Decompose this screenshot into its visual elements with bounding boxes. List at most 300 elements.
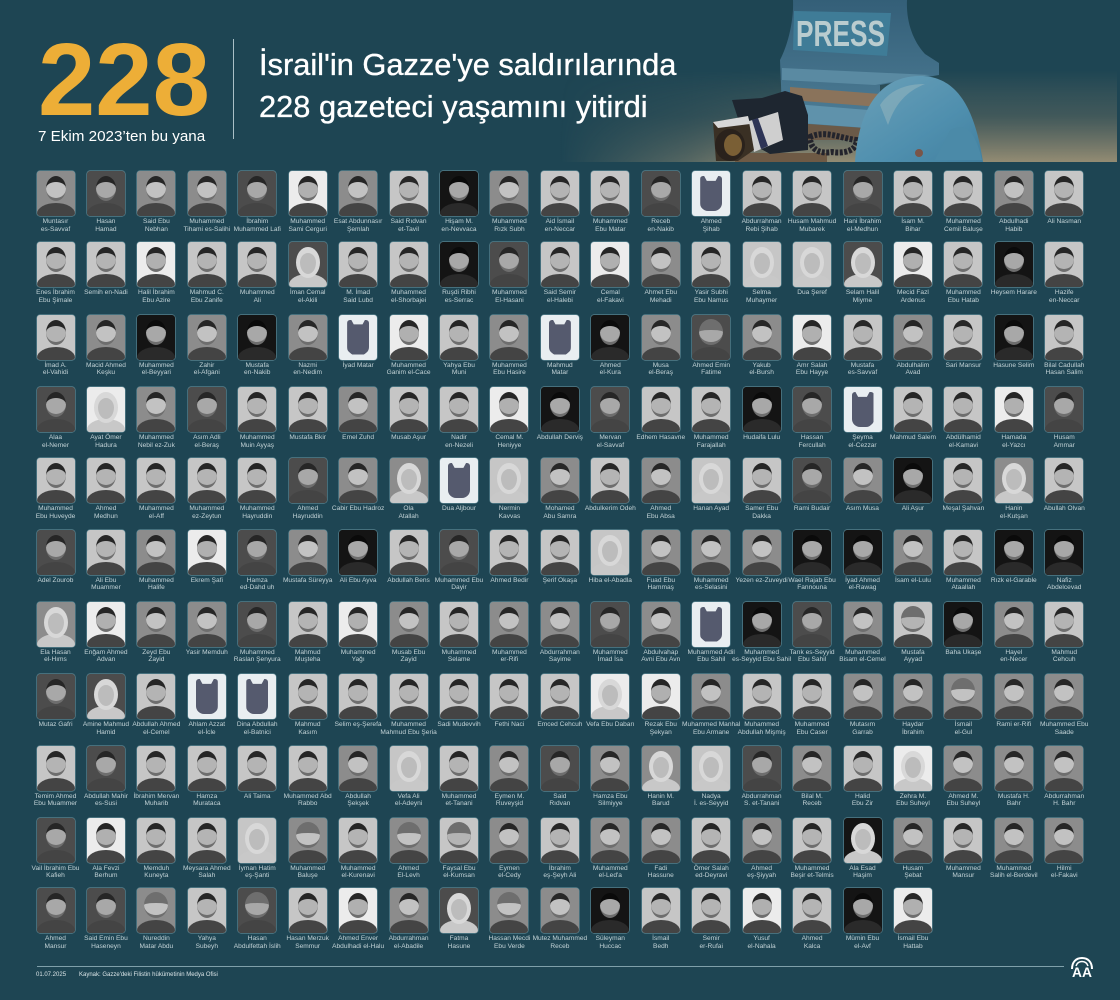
card: Yasir Subhi Ebu Namus: Ebu Namus (694, 297, 728, 304)
card: Mahmud Cehcuh: Cehcuh (1053, 656, 1076, 663)
card: Said Rıdvan et-Tavil (389, 170, 429, 233)
card: Nazmi en-Nedim: en-Nedim (293, 369, 322, 376)
card: Nadir en-Nezeli: Nadir (451, 434, 467, 441)
card: Fatma Hasune: Hasune (448, 943, 470, 950)
card: Muhammed Raslan Şenyura: Muhammed (240, 649, 275, 656)
card: Abdurrahman S. et-Tanani (743, 746, 781, 810)
card: Muhammed ez-Zeytun (188, 458, 226, 522)
card: Muhammed Ali: Ali (254, 297, 261, 304)
card: Ahmed el-Kura: Ahmed (600, 362, 621, 369)
icon: camera (713, 91, 827, 162)
card: Abdurrahman el-Abadile (390, 888, 428, 952)
card: Muhammed Ebu Matar (590, 170, 630, 233)
card: Muhammed Nebil ez-Zuk: Muhammed (139, 434, 174, 441)
card: Sari Mansur: Sari Mansur (946, 362, 981, 369)
card: Mervan el-Savvaf: Mervan (599, 434, 621, 441)
card: Asım Adli el-Beraş: Asım Adli (193, 434, 221, 441)
card: Abdülhamid el-Kamavi: el-Kamavi (949, 442, 978, 449)
card: Muhammed Baluşe: Baluşe (298, 872, 318, 879)
card: Mutez Muhammed Receb: Receb (550, 943, 569, 950)
card: Hanin M. Barud: Barud (652, 800, 670, 807)
card: Eymen el-Cedy (490, 818, 528, 882)
card: Ayat Ömer Hadura: Hadura (95, 442, 117, 449)
card: Rezak Ebu Şekyan: Şekyan (650, 729, 672, 736)
card: Halid Ebu Zir: Halid (855, 793, 870, 800)
card: Mahmud Matar: Mahmud (547, 362, 573, 369)
card: Semir er-Rufai: Semir (703, 935, 720, 942)
card: Baha Ukaşe: Baha Ukaşe (945, 649, 981, 656)
card: Ruşdi Ribhi es-Serrac: Ruşdi Ribhi (442, 289, 476, 296)
card: Yakub el-Bursh: Yakub (753, 362, 771, 369)
card: Mervan el-Savvaf: el-Savvaf (597, 442, 624, 449)
card: İsmail Bedh: İsmail (652, 935, 669, 942)
card: Muhammed et-Tanani (440, 746, 478, 810)
card: Abdullah Mahir es-Susi: Abdullah Mahir (84, 793, 128, 800)
card: Muhammed El-Hasani: Muhammed (492, 289, 527, 296)
card: Muhammed Ebu Huveyde: Muhammed (38, 505, 73, 512)
card: Vail İbrahim Ebu Kafieh: Vail İbrahim Ebu (32, 865, 79, 872)
row 8 (36, 674, 1096, 738)
card: Meysara Ahmed Salah: Meysara Ahmed (183, 865, 231, 872)
card: Baha Ukaşe (944, 602, 982, 666)
icon: coiled cable (810, 134, 856, 152)
card: Ahmet Ebu Mehadi: Mehadi (650, 297, 672, 304)
card: Hanin el-Kutşan: el-Kutşan (1000, 513, 1028, 520)
card: Muhammed el-Beyyari (137, 314, 175, 378)
card: Muhammed ez-Zeytun: ez-Zeytun (192, 513, 221, 520)
card: Muhammed et-Tanani: et-Tanani (445, 800, 473, 807)
card: Memduh Kuneyta (137, 818, 175, 882)
card: Hassan Mecdi Ebu Verde (490, 888, 528, 952)
card: Semir er-Rufai (692, 888, 730, 952)
card: Muhammed Muin Ayyaş: Muhammed (240, 434, 275, 441)
card: Ala Esad Haşim: Ala Esad (849, 865, 876, 872)
card: Musab Ebu Zayid (390, 602, 428, 666)
card: Faysal Ebu el-Kumsan (440, 818, 478, 882)
card: Hasune Selim: Hasune Selim (993, 362, 1034, 369)
card: Muhammed Ataallah (944, 530, 982, 594)
card: Ali Aşur (894, 458, 932, 522)
card: İsmail Ebu Hattab: Hattab (903, 943, 923, 950)
card: Muhammed Yağı: Yağı (352, 656, 365, 663)
card: Muhammed Manhal Ebu Armane: Ebu Armane (693, 729, 729, 736)
card: Muhammed Ali: Muhammed (240, 289, 275, 296)
card: İyad Ahmed el-Rawag: İyad Ahmed (845, 577, 880, 584)
card: Abdurrahman H. Bahr (1045, 746, 1083, 810)
card: Muhammed Selame: Selame (448, 656, 470, 663)
card: Amr Salah Ebu Hayye: Amr Salah (797, 362, 827, 369)
card: Mahmud Kasım: Mahmud (295, 721, 321, 728)
card: Bilal Cadullah Hasan Salim (1045, 314, 1083, 378)
card: Mustafa Ayyad: Ayyad (904, 656, 922, 663)
card: Vefa Ali el-Adeyni (390, 746, 428, 810)
card: Esat Abdunnasır Şemlah: Şemlah (347, 226, 369, 233)
card: İsmail el-Gul: el-Gul (955, 729, 972, 736)
card: Mustafa es-Savvaf (844, 314, 882, 378)
card: Muhammed Abd Rabbo: Rabbo (298, 800, 317, 807)
card: Hasan Merzuk Semmur: Semmur (295, 943, 320, 950)
card: Emced Cehcuh: Emced Cehcuh (537, 721, 582, 728)
card: Hiba el-Abadla: Hiba el-Abadla (589, 577, 632, 584)
card: Ömer Salah ed-Deyravi (692, 818, 730, 882)
card: Mahmud Cehcuh (1045, 602, 1083, 666)
card: Nermin Kavvas: Nermin (499, 505, 520, 512)
card: Muhammed Hayruddin: Hayruddin (242, 513, 272, 520)
card: Rami Budair (793, 458, 831, 522)
card: Rızk el-Garable: Rızk el-Garable (991, 577, 1037, 584)
card: Ahmed Emin Fatime (692, 314, 730, 378)
card: Ahmed Ebu Absa (642, 458, 680, 522)
row 1 (36, 170, 1084, 233)
card: Muhammed Cemil Baluşe: Muhammed (946, 218, 981, 225)
card: Muhammed Salih el-Berdevil: Muhammed (996, 865, 1031, 872)
card: Sadi Mudevvih: Sadi Mudevvih (437, 721, 481, 728)
card: Emel Zuhd (339, 387, 377, 451)
card: Muhammed Bisam el-Cemel (844, 602, 882, 666)
card: Halid Ebu Zir (844, 746, 882, 810)
card: Muhammed el-Led'a: Muhammed (593, 865, 628, 872)
card: Esat Abdunnasır Şemlah: Esat Abdunnasır (334, 218, 382, 225)
card: Husam Mahmud Mubarek (788, 170, 836, 233)
title: İsrail'in Gazze'ye saldırılarında (259, 47, 676, 82)
card: Muhammed el-Led'a: el-Led'a (599, 872, 622, 879)
card: Nermin Kavvas (490, 458, 528, 522)
card: Semih en-Nadi: Semih en-Nadi (84, 289, 128, 296)
card: İsmail Ebu Hattab: İsmail Ebu (898, 935, 928, 942)
card: Hassan Mecdi Ebu Verde: Hassan Mecdi (489, 935, 530, 942)
big number: 228 (38, 22, 210, 137)
card: Hasan Merzuk Semmur (289, 888, 327, 952)
card: Alaa el-Nemer: el-Nemer (42, 442, 69, 449)
card: Muhammed Ganim el-Cace: Muhammed (391, 362, 426, 369)
card: Hasan Hamad: Hasan (96, 218, 115, 225)
card: Abdulhalim Avad: Avad (905, 369, 920, 376)
card: Ali Ebu Ayva (339, 530, 377, 594)
card: İsmail Bedh: Bedh (653, 943, 668, 950)
card: İyad Matar: İyad Matar (343, 362, 374, 369)
card: Dua Aljbour: Dua Aljbour (442, 505, 476, 512)
card: Muhammed Adil Ebu Sahil: Muhammed Adil (688, 649, 735, 656)
card: Vefa Ebu Dabarı: Vefa Ebu Dabarı (586, 721, 634, 728)
card: Muhammed el-Led'a (591, 818, 629, 882)
card: Zehra M. Ebu Suheyl: Ebu Suheyl (896, 800, 930, 807)
card: Mustafa en-Nakib: en-Nakib (244, 369, 270, 376)
card: Edhem Hasavne: Edhem Hasavne (636, 434, 685, 441)
card: Abdullah Mahir es-Susi (87, 746, 125, 810)
card: Yasir Memduh: Yasir Memduh (186, 649, 228, 656)
card: Hasan Abdulfettah İslih: Abdulfettah İslih (234, 943, 281, 950)
card: Ahmed El-Levh: El-Levh (397, 872, 420, 879)
card: Mahmud Matar: Matar (551, 369, 568, 376)
card: Musa el-Beraş (642, 314, 680, 378)
card: Musab Ebu Zayid: Zayid (400, 656, 417, 663)
card: Musa el-Beraş: Musa (653, 362, 669, 369)
card: Eymen el-Cedy: el-Cedy (498, 872, 521, 879)
card: Yakub el-Bursh: el-Bursh (749, 369, 774, 376)
card: Ahmed Bedir: Ahmed Bedir (490, 577, 528, 584)
card: Ala Fevzi Berhum: Ala Fevzi (92, 865, 120, 872)
card: Mustafa Ayyad: Mustafa (901, 649, 925, 656)
card: Ekrem Şafi: Ekrem Şafi (191, 577, 223, 584)
card: Yahya Subeyh: Yahya (198, 935, 216, 942)
card: Hazife en-Neccar: Hazife (1055, 289, 1074, 296)
card: Muhammed Ganim el-Cace: Ganim el-Cace (387, 369, 431, 376)
card: Aid İsmail en-Neccar: en-Neccar (545, 226, 575, 233)
card: Selma Muhaymer (742, 241, 782, 304)
card: Mustafa H. Bahr: Mustafa H. (998, 793, 1030, 800)
row 7 (36, 602, 1096, 666)
card: Yusuf el-Nahala: Yusuf (753, 935, 770, 942)
card: İbrahim eş-Şeyh Ali (541, 818, 579, 882)
card: İsmail Ebu Hattab (894, 888, 932, 952)
card: Mutaz Gafri (36, 674, 74, 738)
title: 228 gazeteci yaşamını yitirdi (259, 89, 648, 124)
card: Rami er-Rifi (995, 674, 1033, 738)
card: İyad Ahmed el-Rawag (844, 530, 882, 594)
card: Muhammed Ganim el-Cace (390, 314, 428, 378)
card: Hassan Fercullah: Fercullah (798, 442, 826, 449)
card: Edhem Hasavne (642, 387, 680, 451)
card: Dina Abdullah el-Batnici: el-Batnici (244, 729, 271, 736)
card: Hamada el-Yazcı: Hamada (1001, 434, 1026, 441)
card: Enes İbrahim Ebu Şimale (36, 241, 76, 304)
card: Hassan Fercullah (793, 387, 831, 451)
card: Şeyma el-Cezzar: Şeyma (852, 434, 873, 441)
card: Semih en-Nadi (84, 241, 128, 296)
card: Hudaifa Lulu: Hudaifa Lulu (743, 434, 780, 441)
card: Muhammed Abd Rabbo: Muhammed Abd (284, 793, 332, 800)
card: Rami Budair: Rami Budair (794, 505, 830, 512)
card: Mahmud Kasım: Kasım (298, 729, 317, 736)
card: Ahlam Azzat el-İcle: Ahlam Azzat (188, 721, 225, 728)
card: İman Cemal el-Akili: İman Cemal (290, 289, 325, 296)
card: Vefa Ali el-Adeyni: Vefa Ali (398, 793, 420, 800)
title (259, 47, 677, 124)
card: Said Emin Ebu Haseneyn: Said Emin Ebu (84, 935, 128, 942)
row 10 (36, 818, 1096, 882)
card: Muhammed el-Shorbajei: el-Shorbajei (391, 297, 426, 304)
card: Fadi Hassune: Fadi (654, 865, 667, 872)
card: Abdulhadi Habib: Habib (1005, 226, 1022, 233)
card: Süleyman Huccac: Huccac (599, 943, 621, 950)
card: Mutez Muhammed Receb: Mutez Muhammed (533, 935, 587, 942)
card: Nadir en-Nezeli: en-Nezeli (445, 442, 473, 449)
card: Süleyman Huccac (591, 888, 629, 952)
card: Nafiz Abdelcevad: Nafiz (1057, 577, 1072, 584)
card: Muhammed Ataallah: Ataallah (951, 584, 975, 591)
card: Muhammed Manhal Ebu Armane: Muhammed Manhal (682, 721, 740, 728)
card: Ahmed Medhun: Medhun (94, 513, 118, 520)
card: Mervan el-Savvaf (591, 387, 629, 451)
card: Ahmed Hayruddin (289, 458, 327, 522)
card: Ahmed Emin Fatime: Fatime (701, 369, 721, 376)
card: Selam Halil Miyme (844, 242, 882, 306)
card: Muhammed el-Shorbajei: Muhammed (391, 289, 426, 296)
card: Hayel en-Necer: Hayel (1005, 649, 1022, 656)
card: Mecid Fazl Ardenus: Ardenus (901, 297, 925, 304)
card: İbrahim Muhammed Lafi: İbrahim (246, 218, 268, 225)
card: İsam M. Bihar (893, 170, 933, 233)
card: Ala Esad Haşim (844, 818, 882, 882)
card: Ola Atallah (390, 458, 428, 522)
card: Mecid Fazl Ardenus (894, 242, 932, 306)
card: Muhammed Ebu Saade (1045, 674, 1083, 738)
card: Abdurrahman H. Bahr: H. Bahr (1053, 800, 1075, 807)
card: Musa el-Beraş: el-Beraş (648, 369, 673, 376)
card: Samer Ebu Dakka: Samer Ebu (745, 505, 778, 512)
card: Ola Atallah: Ola (403, 505, 414, 512)
card: Nadya İ. es-Seyyid: Nadya (702, 793, 721, 800)
card: Muhammed Raslan Şenyura (238, 602, 276, 666)
card: Selma Muhaymer: Selma (752, 289, 771, 296)
card: Hamza ed-Dahd uh (238, 530, 276, 594)
card: Ahmed Bedir (490, 530, 528, 594)
card: Ahmed M. Ebu Suheyl: Ahmed M. (948, 793, 978, 800)
card: Muhammed Ebu Matar: Muhammed (593, 218, 628, 225)
card: Hasan Abdulfettah İslih: Hasan (248, 935, 267, 942)
card: Muhammed Ebu Hasire (490, 314, 528, 378)
card: Hilmi el-Fakavi: el-Fakavi (1051, 872, 1078, 879)
card: Asım Musa: Asım Musa (846, 505, 879, 512)
card: Abdülhamid el-Kamavi (944, 387, 982, 451)
card: Mustafa H. Bahr: Bahr (1007, 800, 1021, 807)
row 11 (36, 888, 1096, 952)
card: Haydar İbrahim: Haydar (902, 721, 924, 728)
card: Heysem Harare: Heysem Harare (991, 289, 1037, 296)
card: Haydar İbrahim (894, 674, 932, 738)
card: Muhammed Ebu Dayir (440, 530, 478, 594)
card: Samer Ebu Dakka (743, 458, 781, 522)
card: Mustafa H. Bahr (995, 746, 1033, 810)
card: Muhammed Ebu Huveyde: Ebu Huveyde (36, 513, 75, 520)
card: Ahmed Hayruddin: Ahmed (297, 505, 318, 512)
card: Abdulkerim Odeh: Abdulkerim Odeh (585, 505, 636, 512)
card: Hilmi el-Fakavi: Hilmi (1057, 865, 1072, 872)
press patch: PRESS (796, 13, 885, 54)
card: Ela Hasan el-Hıms (36, 602, 74, 666)
card: Nureddin Matar Abdu (137, 888, 175, 952)
card: Şerif Okaşa (541, 530, 579, 594)
card: Zehra M. Ebu Suheyl: Zehra M. (900, 793, 926, 800)
card: Hamada el-Yazcı (995, 387, 1033, 451)
card: Muhammed Cemil Baluşe: Cemil Baluşe (944, 226, 983, 233)
card: Ahmed Kalca: Kalca (804, 943, 820, 950)
card: Ahmed Enver Abdulhadi el-Halu (339, 888, 377, 952)
card: Enes İbrahim Ebu Şimale: Enes İbrahim (36, 289, 75, 296)
card: Hamza ed-Dahd uh: ed-Dahd uh (240, 584, 274, 591)
card: Sadi Mudevvih (440, 674, 478, 738)
card: Muhammed Ali (237, 241, 277, 304)
card: Muhammed Hayruddin (238, 458, 276, 522)
card: Ahmed Şihab: Ahmed (701, 218, 722, 225)
card: Rezak Ebu Şekyan: Rezak Ebu (645, 721, 677, 728)
card: Ahmed Ebu Absa: Ebu Absa (647, 513, 675, 520)
card: Tarık es-Seyyid Ebu Sahil: Tarık es-Seyyid (790, 649, 835, 656)
card: Hiba el-Abadla (591, 530, 629, 594)
card: Hamza Murataca (188, 746, 226, 810)
card: Abdulhadi Habib (994, 170, 1034, 233)
row 2 (36, 241, 1084, 304)
card: Eymen el-Cedy: Eymen (499, 865, 520, 872)
card: Fadi Hassune (642, 818, 680, 882)
row 3 (36, 314, 1096, 378)
card: Muhammed Selame (440, 602, 478, 666)
card: Hasan Hamad (86, 170, 126, 233)
card: Hassan Fercullah: Hassan (801, 434, 823, 441)
card: Mahmud Salem (894, 387, 932, 451)
card: Abdurrahman S. et-Tanani: S. et-Tanani (744, 800, 779, 807)
card: Muhammed el-Beyyari: el-Beyyari (142, 369, 171, 376)
card: Abdurrahman el-Abadile: el-Abadile (394, 943, 423, 950)
card: İman Cemal el-Akili: el-Akili (298, 297, 317, 304)
card: Ahmed Emin Fatime: Ahmed Emin (692, 362, 730, 369)
card: Fuad Ebu Hammaş (642, 530, 680, 594)
card: Abdullah Ahmed el-Cemel: Abdullah Ahmed (132, 721, 180, 728)
card: İyman Hatim eş-Şanti (238, 818, 276, 882)
card: Ali Ebu Muammer (87, 530, 125, 594)
card: Ali Taima: Ali Taima (244, 793, 271, 800)
card: Ömer Salah ed-Deyravi: ed-Deyravi (695, 872, 727, 879)
card: Muhammed Ebu Saade: Saade (1055, 729, 1074, 736)
card: Zahir el-Afgani: Zahir (199, 362, 214, 369)
card: Memduh Kuneyta: Kuneyta (144, 872, 168, 879)
card: Cabir Ebu Hadroz (339, 458, 377, 522)
card: Amr Salah Ebu Hayye: Ebu Hayye (796, 369, 828, 376)
card: Muhammed er-Rifi: er-Rifi (501, 656, 518, 663)
card: Mümin Ebu el-Avf: Mümin Ebu (846, 935, 879, 942)
card: Enğam Ahmed Advan (87, 602, 125, 666)
card: Fuad Ebu Hammaş: Hammaş (648, 584, 674, 591)
card: Muhammed Baluşe (289, 818, 327, 882)
card: Husam Ammar: Husam (1054, 434, 1075, 441)
card: Zeyd Ebu Zayid: Zeyd Ebu (142, 649, 170, 656)
card: Enğam Ahmed Advan: Advan (97, 656, 115, 663)
card: Said Rıdvan (541, 746, 579, 810)
card: Muhammed Mahmud Ebu Şeria: Mahmud Ebu Şeria (380, 729, 437, 736)
card: Ahmed eş-Şiyyah: eş-Şiyyah (747, 872, 776, 879)
card: Muhammed Ebu Hatab: Ebu Hatab (948, 297, 979, 304)
card: Hanin M. Barud (642, 746, 680, 810)
card: Ela Hasan el-Hıms: Ela Hasan (40, 649, 71, 656)
card: Selam Halil Miyme: Miyme (853, 297, 872, 304)
card: Muhammed Ebu Caser: Ebu Caser (796, 729, 828, 736)
card: Tarık es-Seyyid Ebu Sahil (793, 602, 831, 666)
card: Ela Hasan el-Hıms: el-Hıms (44, 656, 67, 663)
card: Husam Ammar (1045, 387, 1083, 451)
card: Hanan Ayad (692, 458, 730, 522)
card: Muhammed Halife: Muhammed (139, 577, 174, 584)
card: Mustafa Süreyya: Mustafa Süreyya (283, 577, 332, 584)
card: Muhammed Abdullah Mişmiş: Abdullah Mişmiş (738, 729, 786, 736)
card: Temim Ahmed Ebu Muammer: Temim Ahmed (35, 793, 76, 800)
card: Abdullah Şekşek: Abdullah (345, 793, 371, 800)
card: Muhammed Ebu Huveyde (36, 458, 74, 522)
card: Abdurrahman Rebi Şihab: Abdurrahman (742, 218, 782, 225)
card: Abdulvahap Avni Ebu Avn (642, 602, 680, 666)
card: Selam Halil Miyme: Selam Halil (846, 289, 879, 296)
card: Muhammed Muin Ayyaş (238, 387, 276, 451)
card: Abdurrahman Sayime: Abdurrahman (540, 649, 580, 656)
card: İsmail Bedh (642, 888, 680, 952)
card: Ahmed Hayruddin: Hayruddin (293, 513, 323, 520)
card: Nadya İ. es-Seyyid: İ. es-Seyyid (694, 800, 728, 807)
card: Bilal Cadullah Hasan Salim: Hasan Salim (1046, 369, 1083, 376)
card: Bilal Cadullah Hasan Salim: Bilal Cadullah (1044, 362, 1084, 369)
card: Muhammed el-Shorbajei (389, 241, 429, 304)
card: Hanin el-Kutşan (995, 458, 1033, 522)
card: Cemal el-Fakavi (590, 241, 630, 304)
card: Muhammed es-Seyyid Ebu Sahil: es-Seyyid Ebu Sahil (732, 656, 791, 663)
